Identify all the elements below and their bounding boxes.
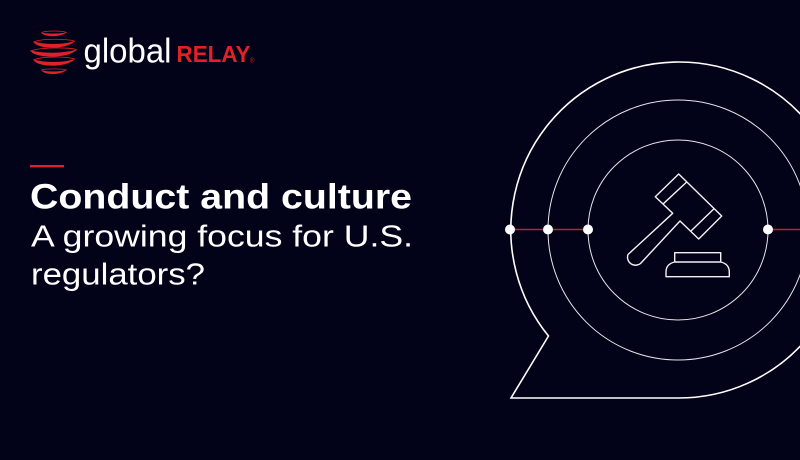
red connector lines bbox=[510, 228, 800, 230]
connector nodes bbox=[505, 224, 773, 234]
logo: Global Relay bbox=[30, 31, 255, 74]
title: Conduct and culture bbox=[30, 178, 412, 216]
gavel head bands bbox=[663, 182, 714, 231]
gavel base bbox=[666, 253, 729, 277]
heading block bbox=[30, 178, 413, 292]
logo registered mark: ® bbox=[250, 58, 255, 64]
accent rule bbox=[30, 165, 64, 167]
logo wordmark: RELAY: RELAY bbox=[176, 41, 251, 67]
icon: red striped globe bbox=[30, 31, 78, 74]
gavel head and handle bbox=[628, 174, 722, 265]
speech bubble outline bbox=[511, 62, 800, 398]
subtitle line two: regulators? bbox=[31, 256, 205, 292]
subtitle line one: A growing focus for U.S. bbox=[31, 218, 413, 254]
logo wordmark: global: global bbox=[84, 32, 172, 70]
middle circle bbox=[548, 100, 800, 360]
icon: gavel bbox=[628, 174, 729, 277]
inner circle bbox=[588, 140, 768, 320]
speech bubble with concentric circles bbox=[511, 62, 800, 398]
